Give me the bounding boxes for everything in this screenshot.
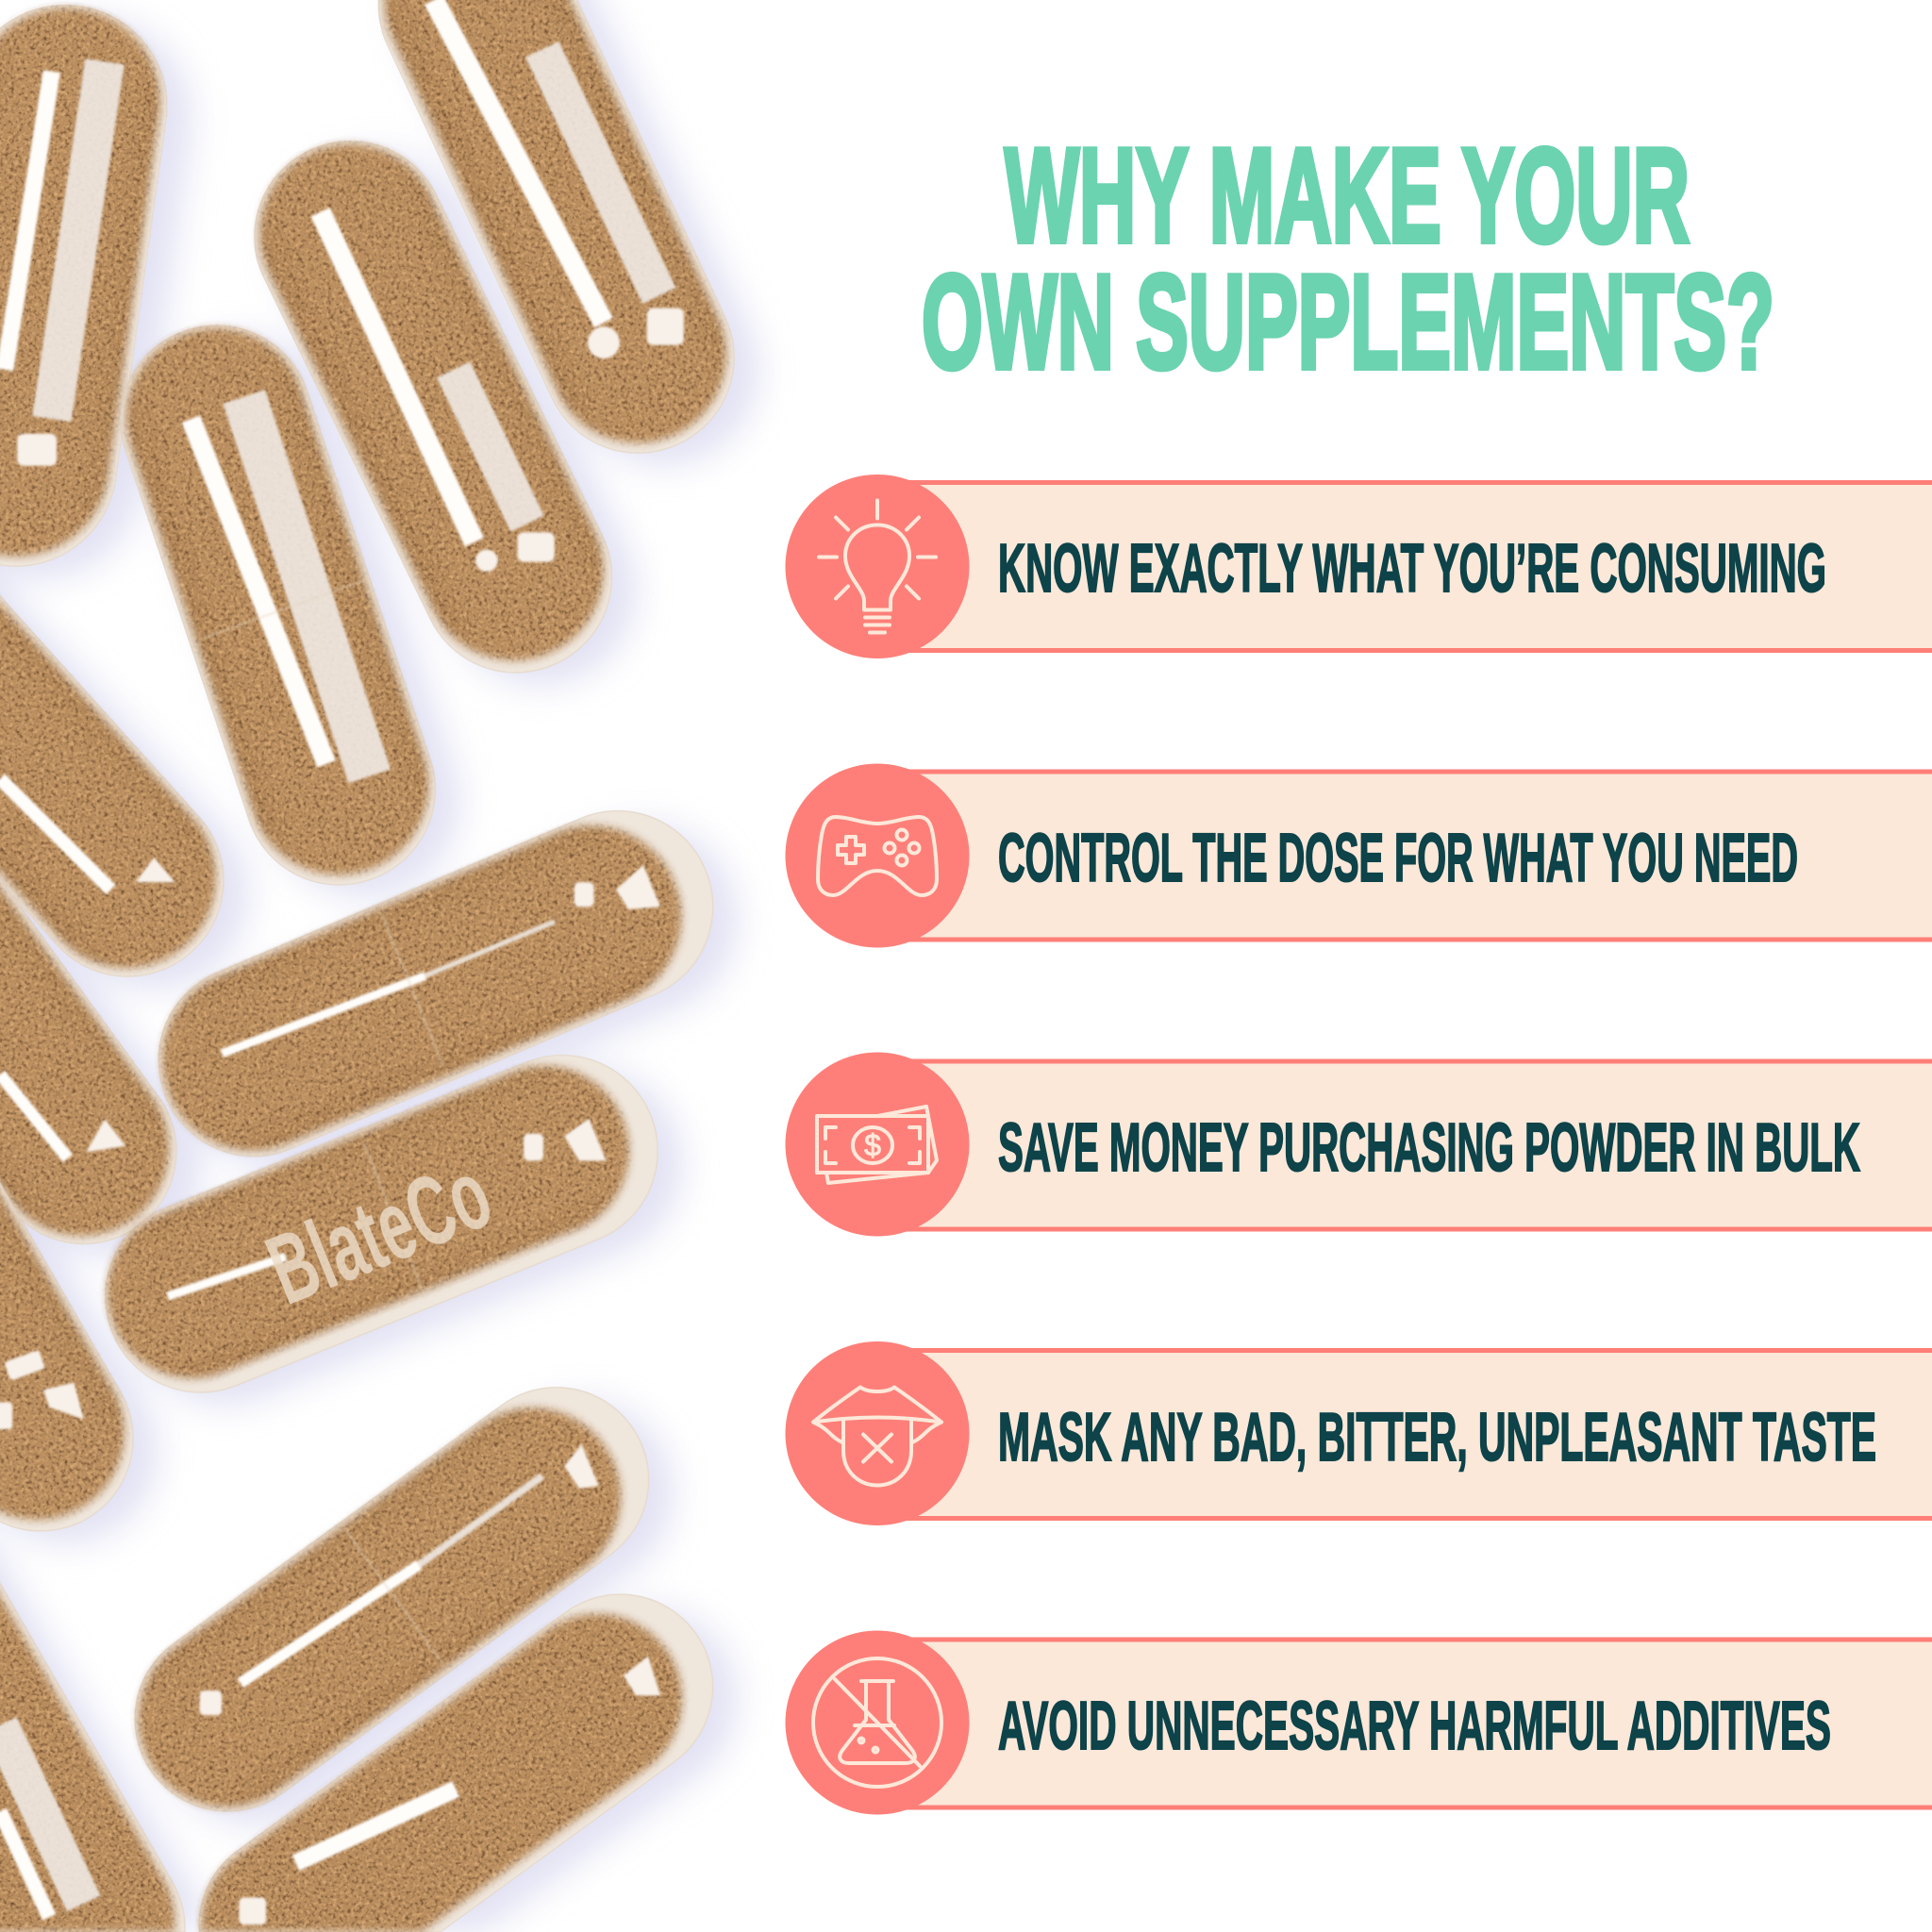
badge circle <box>785 475 970 658</box>
icon: game controller <box>818 817 937 895</box>
capsule: bottom left corner <box>0 1494 185 1932</box>
capsule: top left <box>0 0 180 579</box>
panel: reason 1 <box>785 475 1932 658</box>
title <box>922 121 1774 397</box>
badge circle <box>785 1630 970 1815</box>
capsule: centre left <box>95 300 460 910</box>
capsule shadows <box>0 0 790 1932</box>
photo: scattered capsules <box>0 0 790 1932</box>
capsule: bottom <box>199 1594 713 1932</box>
capsule: upper centre <box>223 109 643 705</box>
capsule: left edge 2 <box>0 704 213 1280</box>
capsule: branded BlateCo <box>76 1026 687 1421</box>
capsule imprint: BlateCo: BlateCo <box>253 1138 506 1325</box>
icon: tongue out <box>813 1387 941 1485</box>
band <box>877 1640 1932 1807</box>
capsule: top right <box>347 0 765 484</box>
icon: light bulb <box>819 500 936 632</box>
capsule: middle horizontal <box>129 781 742 1186</box>
band <box>877 483 1932 651</box>
icon: bank notes <box>817 1107 937 1183</box>
icon: no chemicals flask <box>813 1658 941 1787</box>
badge circle <box>785 764 970 947</box>
panel: reason 3 <box>785 1053 1932 1236</box>
capsule: lower <box>98 1351 686 1848</box>
capsule highlights <box>0 0 684 1924</box>
band <box>877 1061 1932 1229</box>
panel: reason 2 <box>785 764 1932 947</box>
band <box>877 1351 1932 1519</box>
badge circle <box>785 1341 970 1525</box>
icon: bank notes: $ <box>864 1128 881 1162</box>
capsule: left edge 3 <box>0 971 167 1565</box>
panel: reason 4 <box>785 1341 1932 1525</box>
capsule: left edge 1 <box>0 440 262 1016</box>
band <box>877 772 1932 940</box>
panel: reason 5 <box>785 1630 1932 1815</box>
badge circle <box>785 1053 970 1236</box>
